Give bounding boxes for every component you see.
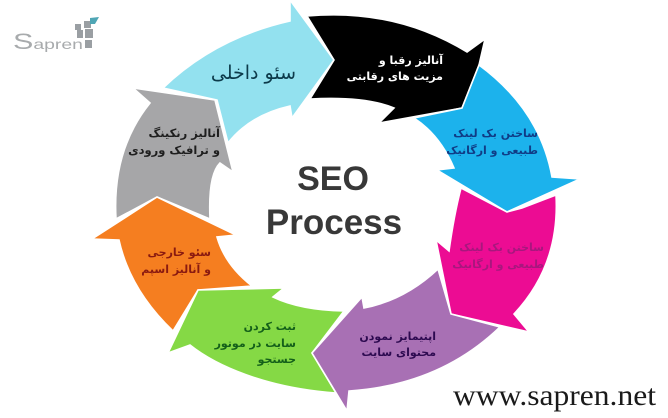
label: light blue arrow: سئو داخلی [211,62,296,84]
label: blue arrow: ساختن بک لینک [453,127,538,140]
title: SEO Process: SEO [297,160,369,198]
label: magenta arrow: طبیعی و ارگانیک [452,258,544,271]
label: green arrow [214,320,296,366]
arrow: purple [312,269,500,411]
label: orange arrow: سئو خارجی [148,246,211,259]
title: SEO Process: Process [266,203,402,242]
label: gray arrow [128,126,221,158]
arrow: magenta [436,188,556,332]
label: black arrow [347,53,443,83]
label: green arrow: ثبت کردن [244,320,296,333]
label: magenta arrow [452,241,544,271]
arrow: light blue [163,0,334,143]
label: blue arrow [446,127,538,157]
title: SEO Process [266,160,402,242]
label: gray arrow: آنالیز رنکینگ [148,126,221,140]
label: orange arrow: و آنالیز اسپم [141,262,211,276]
label: purple arrow: محتوای سایت [361,346,436,359]
arrow: gray [116,88,233,219]
arrow: blue [414,65,580,212]
label: black arrow: آنالیز رقبا و [378,53,443,67]
logo: Sapren [13,17,99,54]
arrow: green [168,288,344,393]
label: green arrow: جستجو [257,353,296,366]
label: purple arrow [359,330,436,359]
logo: Sapren: S apren [13,29,83,54]
label: magenta arrow: ساختن بک لینک [459,241,544,254]
arrow: orange [92,197,252,331]
arrow: black [307,15,485,123]
label: black arrow: مزیت های رقابتی [347,70,443,83]
label: orange arrow [141,246,211,276]
website url: www.sapren.net [453,379,657,412]
label: gray arrow: و ترافیک ورودی [128,143,220,158]
label: blue arrow: طبیعی و ارگانیک [446,144,538,157]
label: purple arrow: اپتیمایز نمودن [359,330,436,343]
label: green arrow: سایت در موتور [214,337,296,350]
